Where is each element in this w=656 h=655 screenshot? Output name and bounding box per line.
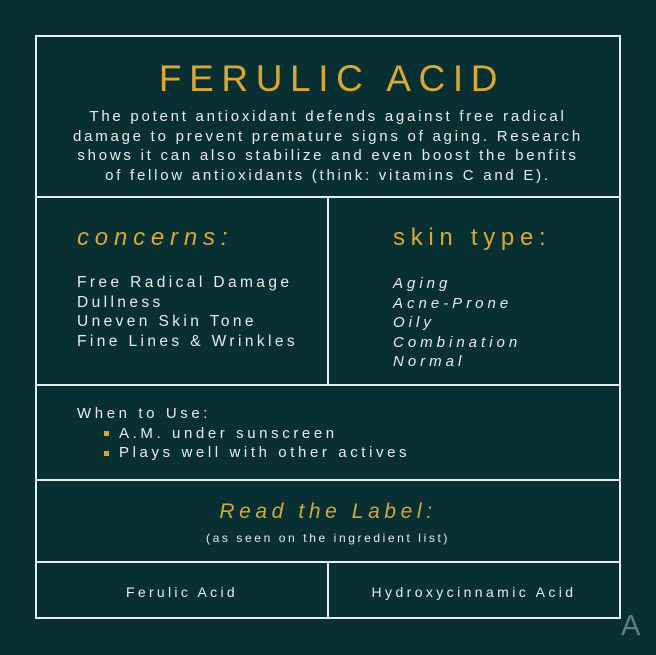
skin type list: Normal [393,353,465,370]
skin type list: Combination [393,334,521,350]
bullet list: Plays well with other actives [119,444,410,461]
subtitle: (as seen on the ingredient list) [206,531,450,545]
concerns list: Uneven Skin Tone [77,313,257,330]
concerns list: Dullness [77,294,164,310]
panel: concerns [77,224,298,350]
description: damage to prevent premature signs of aging. Research [73,128,583,144]
concerns heading: concerns: [77,224,233,251]
title: FERULIC ACID [159,58,505,99]
frame [35,35,621,619]
skin type list: Oily [393,314,435,331]
bullet list [104,424,410,461]
concerns list: Fine Lines & Wrinkles [77,332,298,350]
concerns list [77,274,298,350]
description: shows it can also stabilize and even boost the benfits [77,147,579,164]
skin type heading: skin type: [393,224,551,251]
read the label heading: Read the Label: [219,500,437,523]
description: of fellow antioxidants (think: vitamins C and E). [105,166,551,184]
panel: when to use [77,405,410,461]
panel: when to use: When to Use: [77,405,211,422]
panel: skin type [392,224,551,370]
description [73,108,583,184]
description: The potent antioxidant defends against free radical [89,108,567,125]
bullet list: A.M. under sunscreen [119,424,338,442]
label: hydroxycinnamic acid: Hydroxycinnamic Acid [372,584,576,600]
logo: A [621,610,640,642]
concerns list: Free Radical Damage [77,274,292,291]
skin type list: Aging [393,275,451,292]
skin type list: Acne-Prone [393,294,512,312]
skin type list [392,275,521,370]
label: ferulic acid: Ferulic Acid [126,584,238,600]
